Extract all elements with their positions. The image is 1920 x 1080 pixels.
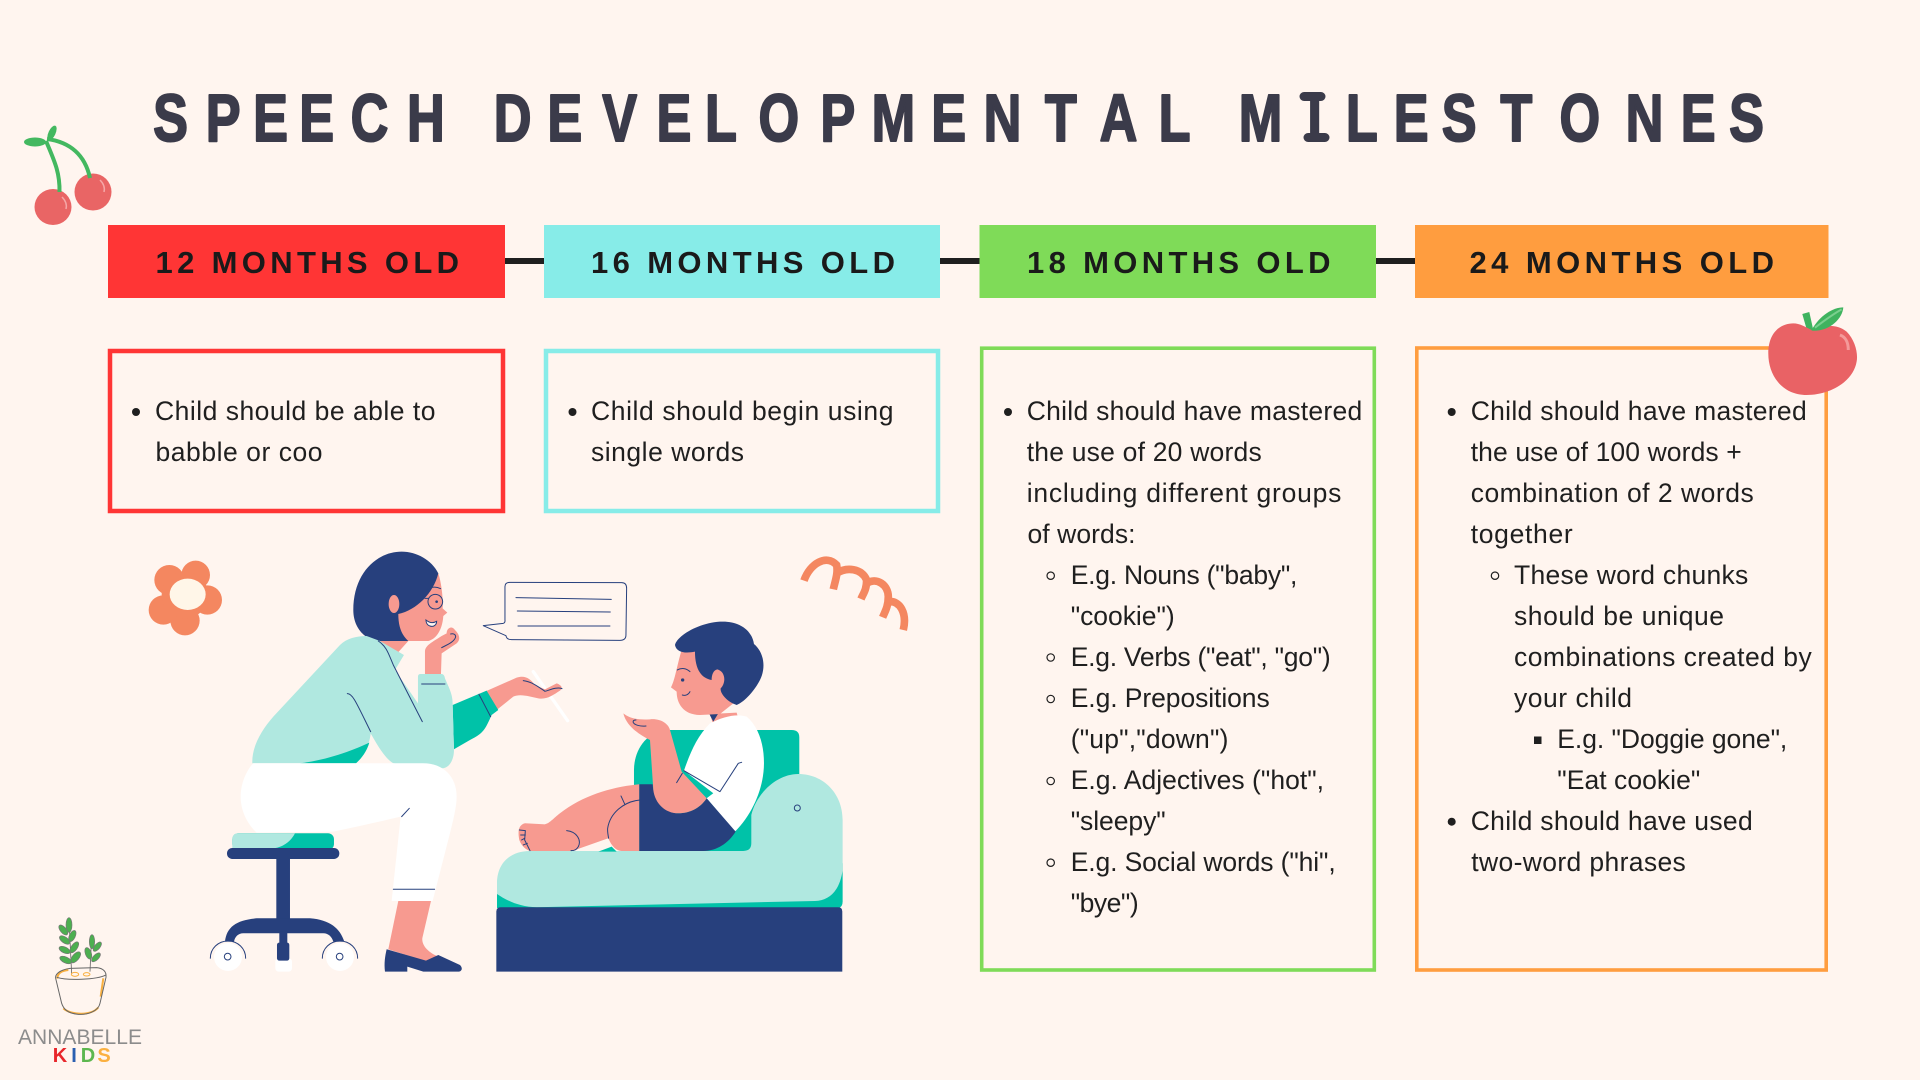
logo wordmark: ANNABELLE xyxy=(18,1026,142,1049)
panel: 24 months: combinations created by xyxy=(1514,642,1812,672)
panel: 24 months: E.g. "Doggie gone", xyxy=(1557,724,1787,754)
panel: 24 months: Child should have mastered xyxy=(1471,396,1807,426)
icon: orange squiggle xyxy=(804,560,904,630)
boy arm xyxy=(623,713,742,813)
panel: 24 months: your child xyxy=(1514,683,1632,713)
boy leg xyxy=(519,784,640,852)
logo KIDS: K xyxy=(53,1045,68,1067)
panel: 18 months: of words: xyxy=(1028,519,1136,549)
panel: 18 months: E.g. Verbs ("eat", "go") xyxy=(1071,642,1331,672)
logo plant pot xyxy=(56,918,106,1014)
panel: 24 months: together xyxy=(1471,519,1573,549)
sweater xyxy=(252,636,454,768)
panel: 24 months xyxy=(1417,348,1826,970)
boy head xyxy=(671,622,763,725)
header: 12 months old: 12 MONTHS OLD xyxy=(156,245,459,280)
panel: 18 months: E.g. Nouns ("baby", xyxy=(1071,560,1297,590)
panel: 18 months: "sleepy" xyxy=(1071,806,1166,836)
title: SPEECH DEVELOPMENTAL MILESTONES xyxy=(153,81,1764,155)
panel: 18 months: "cookie") xyxy=(1071,601,1175,631)
panel: 24 months: Child should have used xyxy=(1471,806,1753,836)
header: 18 months old xyxy=(980,225,1376,298)
connector lines xyxy=(505,258,1415,264)
panel: 24 months: These word chunks xyxy=(1514,560,1748,590)
boy shorts xyxy=(639,784,736,851)
panel: 18 months: including different groups xyxy=(1027,478,1341,508)
far arm xyxy=(453,672,568,749)
sofa xyxy=(496,730,843,972)
header: 24 months old: 24 MONTHS OLD xyxy=(1470,245,1774,280)
panel: 18 months: "bye") xyxy=(1071,888,1139,918)
panel: 24 months: should be unique xyxy=(1514,601,1724,631)
panel: 12 months: Child should be able to xyxy=(155,396,436,426)
panel: 24 months: "Eat cookie" xyxy=(1557,765,1700,795)
icon: apple xyxy=(1768,307,1857,395)
panel: 18 months: E.g. Prepositions xyxy=(1071,683,1270,713)
lower leg and shoe xyxy=(385,901,462,972)
logo KIDS xyxy=(53,1045,111,1067)
panel: 18 months: E.g. Adjectives ("hot", xyxy=(1071,765,1324,795)
icon: cherries xyxy=(24,124,112,225)
icon: orange flower xyxy=(149,561,222,635)
panel: 16 months: Child should begin using xyxy=(591,396,894,426)
panel: 18 months: the use of 20 words xyxy=(1027,437,1262,467)
header: 18 months old: 18 MONTHS OLD xyxy=(1027,245,1330,280)
panel: 16 months xyxy=(546,351,938,511)
header: 24 months old xyxy=(1415,225,1828,298)
header: 12 months old xyxy=(108,225,505,298)
panel: 18 months xyxy=(982,348,1374,970)
head xyxy=(353,552,447,654)
panel: 16 months: single words xyxy=(591,437,744,467)
chin hand xyxy=(425,628,459,674)
panel: 12 months: babble or coo xyxy=(156,437,322,467)
logo KIDS: D xyxy=(81,1045,95,1067)
logo KIDS: S xyxy=(97,1045,111,1067)
panel: 18 months: E.g. Social words ("hi", xyxy=(1071,847,1336,877)
panel: 24 months: two-word phrases xyxy=(1471,847,1686,877)
logo KIDS: I xyxy=(71,1045,77,1067)
panel: 24 months: the use of 100 words + xyxy=(1471,437,1742,467)
panel: 18 months: ("up","down") xyxy=(1071,724,1228,754)
illustration: woman on stool xyxy=(210,552,568,972)
boy shirt xyxy=(684,715,764,832)
stool xyxy=(210,833,358,972)
trousers xyxy=(241,763,457,901)
panel: 24 months: combination of 2 words xyxy=(1471,478,1754,508)
illustration: speech bubble xyxy=(483,582,627,640)
header: 16 months old xyxy=(544,225,940,298)
header: 16 months old: 16 MONTHS OLD xyxy=(591,245,895,280)
panel: 18 months: Child should have mastered xyxy=(1027,396,1362,426)
logo: Annabelle Kids xyxy=(56,918,106,1014)
illustration: boy on sofa xyxy=(496,622,843,972)
panel: 12 months xyxy=(110,351,503,511)
